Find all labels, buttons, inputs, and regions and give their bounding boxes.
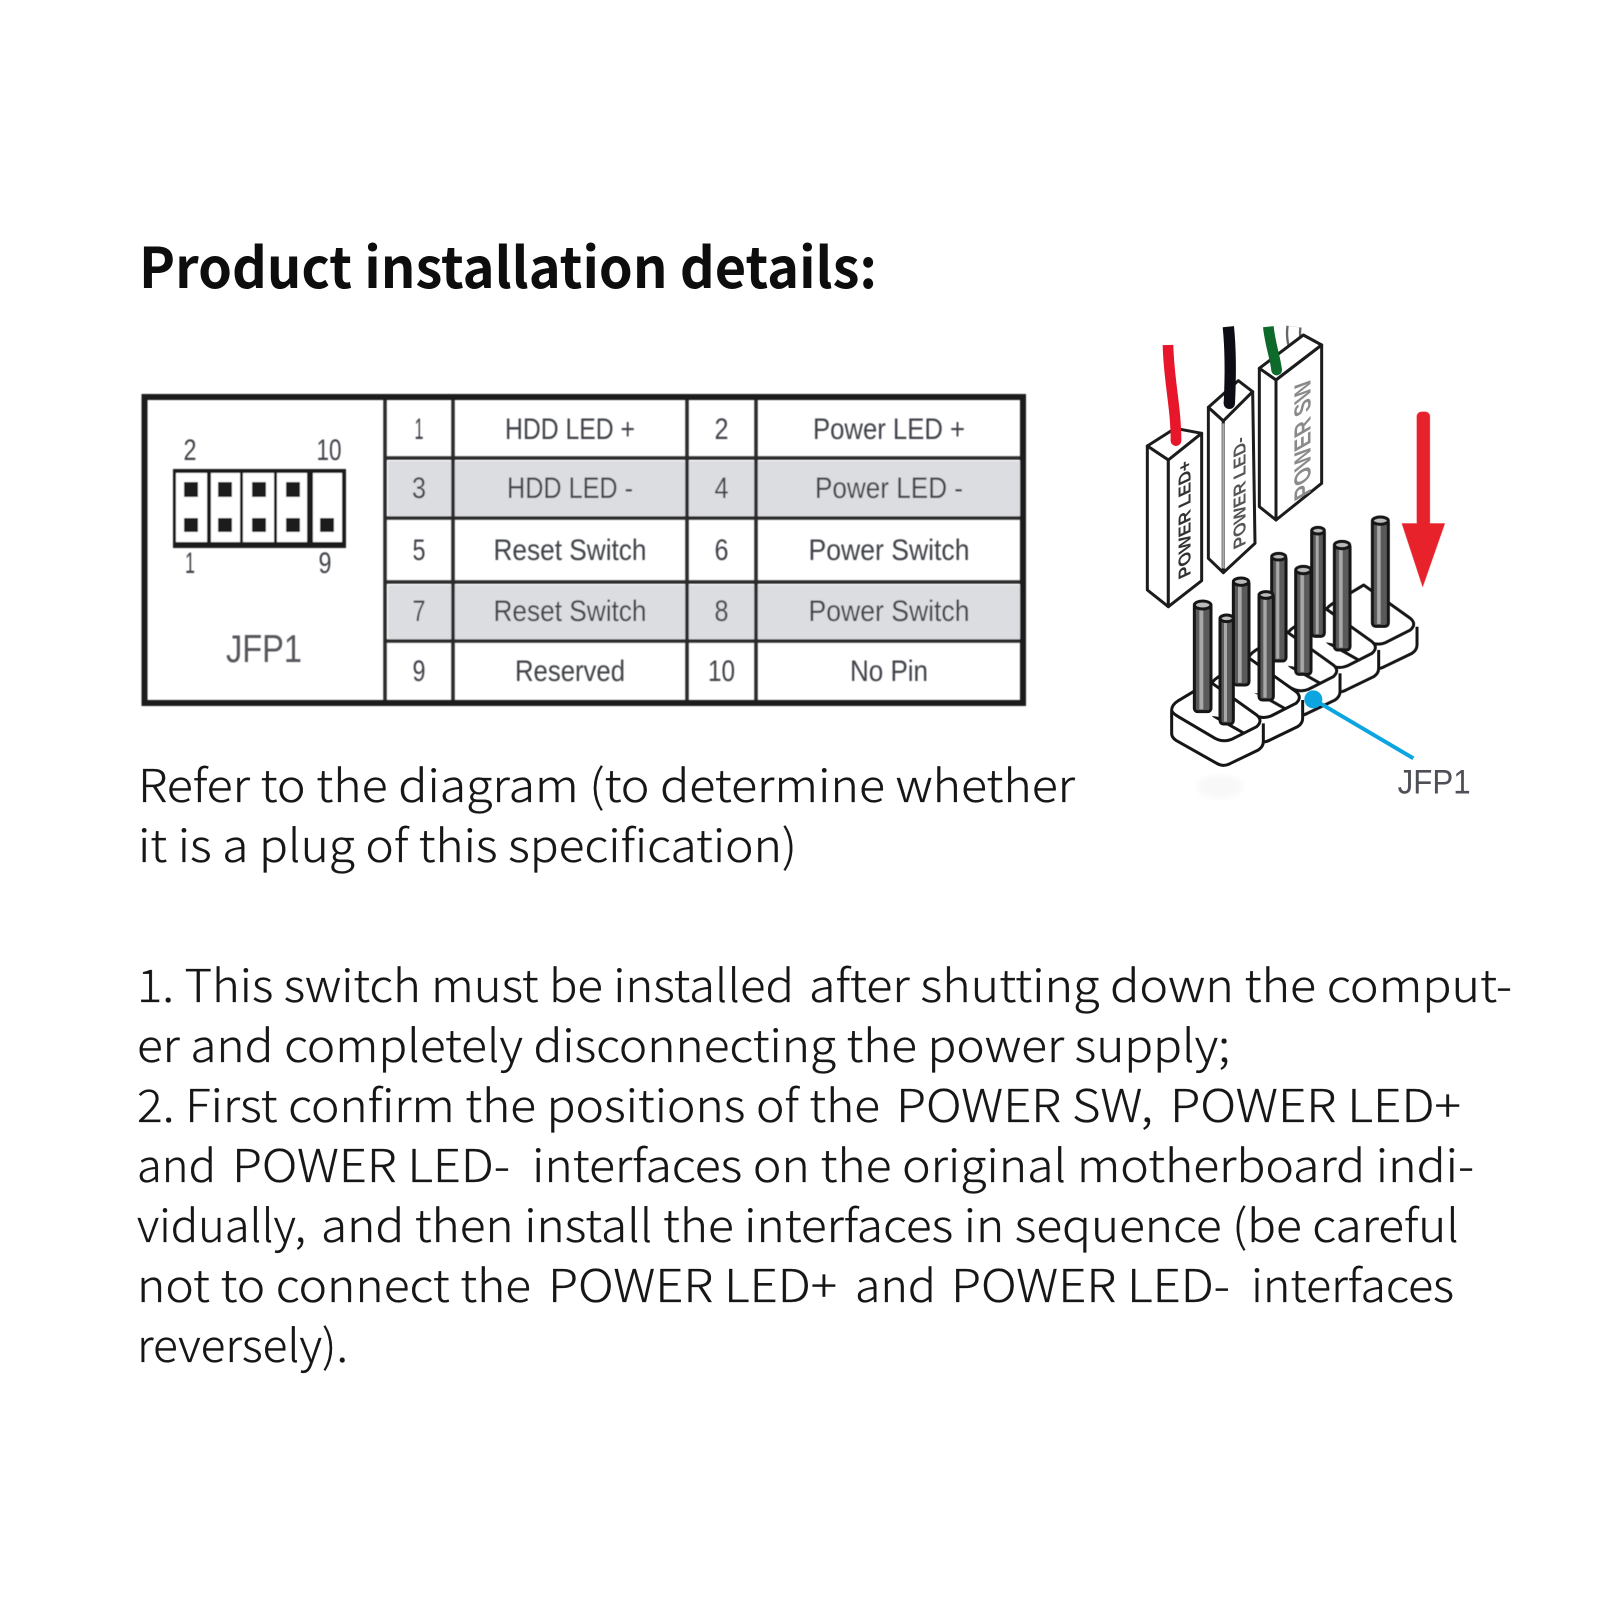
text block: installation steps: POWER LED-: [232, 1130, 510, 1195]
row 2: 3: [412, 472, 426, 505]
row 1: 1: [414, 413, 424, 446]
text block: installation steps: and: [855, 1250, 936, 1315]
row 3: Power Switch: [808, 534, 970, 567]
text block: installation steps: 1. This switch must be installed: [137, 950, 794, 1015]
pin H: [1334, 541, 1350, 650]
icon: JFP1 header pin diagram: [173, 469, 346, 548]
connector: POWER LED-: [1208, 327, 1255, 573]
pin G: [1312, 527, 1324, 636]
title: Product installation details:: [139, 224, 877, 305]
pin I: [1372, 517, 1388, 626]
header pin block: [1172, 517, 1417, 765]
JFP1 label: JFP1: [226, 628, 302, 671]
text block: plug note: Refer to the diagram (to determine whether: [138, 750, 1076, 815]
arrow: insert downward: [1402, 412, 1445, 587]
connector: POWER LED+: [1147, 345, 1202, 607]
header pin numbers: 10: [316, 434, 342, 467]
base 3: [1248, 632, 1340, 715]
row 1: [414, 413, 965, 446]
text block: installation steps: 2. First confirm the positions of the: [137, 1070, 880, 1135]
text block: installation steps: POWER LED-: [951, 1250, 1230, 1315]
base 4: [1287, 608, 1379, 692]
table grid lines: [385, 400, 1020, 700]
text block: installation steps: POWER SW,: [896, 1070, 1153, 1135]
row 4: Power Switch: [808, 595, 970, 628]
base 5: [1325, 585, 1417, 669]
row 5: Reserved: [515, 655, 625, 688]
pin B: [1220, 615, 1233, 724]
text block: installation steps: POWER LED+: [548, 1250, 837, 1315]
row 4: [412, 595, 970, 628]
row 5: 9: [412, 655, 426, 688]
text block: installation steps: reversely).: [137, 1310, 348, 1375]
callout: JFP1 pointer: [1304, 690, 1413, 758]
pin F: [1296, 566, 1311, 674]
base 2: [1211, 658, 1303, 742]
text block: installation steps: vidually,: [137, 1190, 306, 1255]
panel: JFP1 pinout table: [144, 397, 1023, 703]
text block: installation steps: and: [137, 1130, 216, 1195]
pin C: [1233, 578, 1249, 685]
table row shading: [388, 461, 1020, 639]
row 4: 8: [714, 595, 728, 628]
text block: installation steps: and then install the interfaces in sequence (be careful: [321, 1190, 1459, 1255]
text block: installation steps: after shutting down the comput-: [809, 950, 1512, 1015]
header pin numbers: 1: [185, 547, 195, 580]
row 2: HDD LED -: [507, 472, 633, 505]
row 3: [412, 534, 970, 567]
row 1: Power LED +: [813, 413, 965, 446]
callout label: JFP1: [1398, 763, 1471, 801]
panel: connector installation illustration: [1147, 327, 1471, 801]
text block: installation steps: [137, 950, 1512, 1375]
pin D: [1259, 592, 1273, 700]
row 4: Reset Switch: [494, 595, 646, 628]
connector: POWER LED-: POWER LED-: [1230, 433, 1249, 553]
row 5: No Pin: [850, 655, 928, 688]
row 5: 10: [708, 655, 735, 688]
row 3: 5: [412, 534, 426, 567]
row 5: [412, 655, 928, 688]
row 1: HDD LED +: [505, 413, 635, 446]
text block: installation steps: interfaces on the original motherboard indi-: [532, 1130, 1474, 1195]
connector: POWER SW: [1259, 327, 1322, 520]
header pin numbers: [184, 434, 342, 580]
base 1: [1172, 682, 1263, 765]
header pin numbers: 9: [318, 547, 332, 580]
text block: plug note: [138, 750, 1076, 875]
row 1: 2: [714, 413, 728, 446]
row 3: 6: [714, 534, 728, 567]
connector: POWER LED+: POWER LED+: [1174, 457, 1194, 583]
text block: installation steps: POWER LED+: [1170, 1070, 1461, 1135]
row 4: 7: [412, 595, 426, 628]
header pin numbers: 2: [184, 434, 196, 467]
text block: plug note: it is a plug of this specification): [138, 810, 797, 875]
row 2: Power LED -: [815, 472, 963, 505]
text block: installation steps: not to connect the: [137, 1250, 531, 1315]
pin A: [1194, 601, 1211, 712]
text block: installation steps: er and completely disconnecting the power supply;: [137, 1010, 1230, 1075]
connector: POWER SW: POWER SW: [1290, 373, 1316, 505]
pin E: [1272, 553, 1286, 661]
row 2: [412, 472, 963, 505]
row 3: Reset Switch: [494, 534, 646, 567]
row 2: 4: [714, 472, 728, 505]
text block: installation steps: interfaces: [1251, 1250, 1454, 1315]
table outer border: [144, 397, 1023, 703]
